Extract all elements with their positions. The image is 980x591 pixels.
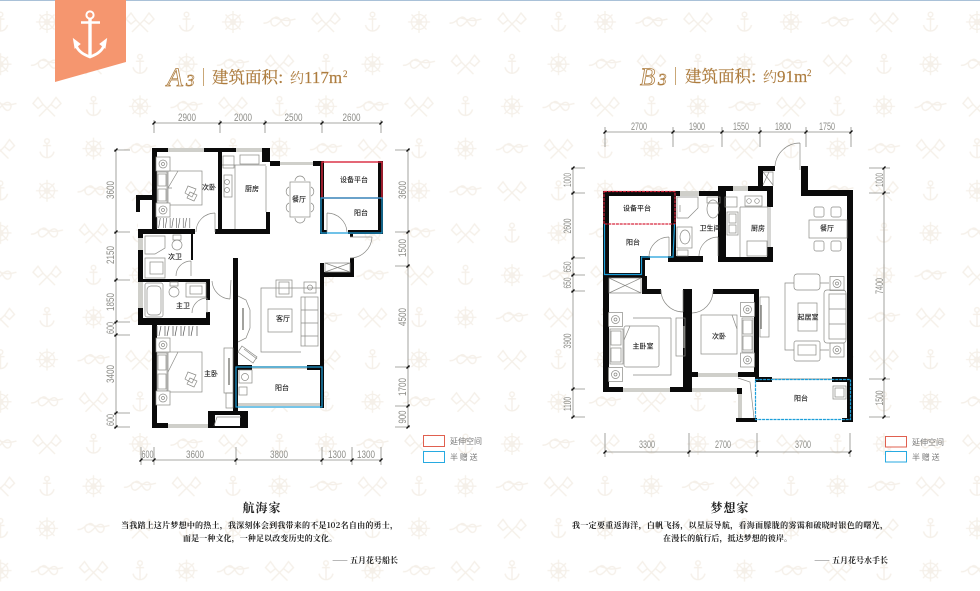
dimensions B3: top: 2700 (631, 121, 647, 133)
dimensions A3: right: 1700 (397, 378, 409, 396)
heading: A3 area (165, 63, 348, 92)
dimensions A3: left: 2150 (105, 246, 117, 264)
B3 room labels (623, 204, 834, 404)
dimensions A3: right: 1500 (397, 239, 409, 257)
dimensions A3: bottom: 3800 (270, 449, 288, 461)
A3 room labels: 阳台 (354, 208, 368, 218)
dimensions A3: bottom (140, 447, 382, 465)
dimensions B3: left: 1100 (562, 397, 574, 411)
A3 room labels: 客厅 (276, 314, 290, 324)
dimensions A3: left: 600 (105, 322, 117, 334)
dimensions B3: bottom: 2700 (715, 439, 731, 451)
dimensions B3: left: 650 (562, 262, 574, 272)
A3 furniture (145, 155, 372, 426)
A3 room labels: 厨房 (245, 184, 259, 194)
dimensions B3: left: 2600 (562, 218, 574, 234)
dimensions B3: left: 1000 (562, 173, 574, 187)
A3 room labels: 次卫 (168, 252, 182, 262)
B3 room labels: 设备平台 (623, 204, 651, 214)
dimensions B3: left: 650 (562, 278, 574, 288)
signature B3: —— 五月花号水手长 (814, 555, 888, 566)
heading: B3 area: 91m (777, 67, 807, 86)
caption A3 (121, 499, 398, 566)
heading: A3 area: 117m (304, 68, 342, 87)
caption body B3 (572, 520, 888, 544)
B3 room labels: 餐厅 (820, 224, 834, 234)
dimensions A3: bottom: 600 (142, 449, 154, 461)
B3 room labels: 主卧室 (632, 342, 654, 352)
A3 room labels: 次卧 (202, 182, 216, 192)
legend A3 (424, 436, 482, 463)
caption body A3: 当我踏上这片梦想中的热土，我深刻体会到我带来的不是102名自由的勇士， (121, 520, 398, 531)
B3 furniture (608, 143, 847, 418)
floor plan A3 (136, 148, 383, 428)
dimensions A3: right (395, 148, 410, 428)
A3 extension space outline (322, 162, 382, 198)
caption body A3: 而是一种文化，一种足以改变历史的文化。 (183, 533, 337, 544)
dimensions A3: right: 4500 (397, 308, 409, 326)
A3 windows (138, 148, 321, 428)
dimensions B3: top (604, 121, 852, 147)
B3 room labels: 厨房 (751, 224, 765, 234)
dimensions A3: left (105, 148, 130, 428)
B3 half-gift outlines (604, 224, 850, 420)
heading: B3 area: 2 (807, 68, 812, 78)
dimensions A3: left: 3400 (105, 365, 117, 383)
icon: anchor (74, 11, 106, 57)
signature A3: —— 五月花号船长 (332, 555, 398, 566)
caption body A3 (121, 520, 398, 544)
B3 room labels: 阳台 (626, 238, 640, 248)
A3 room labels: 设备平台 (340, 175, 368, 185)
legend A3: 半 赠 送 (450, 452, 478, 463)
dimensions A3: top: 2000 (234, 112, 252, 124)
dimensions B3: left (562, 166, 585, 418)
dimensions B3: right: 1000 (874, 173, 886, 187)
dimensions B3: top: 1550 (733, 121, 749, 133)
B3 windows (623, 186, 832, 418)
caption body B3: 在漫长的航行后，抵达梦想的彼岸。 (663, 533, 792, 544)
A3 room labels: 主卫 (176, 301, 190, 311)
top rule (0, 0, 980, 1)
dimensions B3: left: 3900 (562, 334, 574, 348)
heading: B3 area: 建筑面积: (685, 63, 756, 87)
floor plan B3 (603, 143, 853, 422)
B3 room labels: 起居室 (798, 312, 818, 322)
caption B3 (572, 499, 888, 566)
legend A3: 延伸空间 (450, 436, 482, 447)
heading: B3 area: 3 (657, 70, 666, 89)
dimensions A3: bottom: 1300 (328, 449, 346, 461)
heading: A3 area: 建筑面积: (212, 64, 283, 88)
B3 room labels: 卫生间 (700, 224, 720, 234)
dimensions A3: left: 3600 (105, 181, 117, 199)
dimensions A3: left: 600 (105, 414, 117, 426)
dimensions A3: bottom: 1300 (357, 449, 375, 461)
caption body B3: 我一定要重返海洋，白帆飞扬，以星辰导航，看海面朦胧的雾霭和破晓时银色的曙光， (572, 520, 888, 531)
dimensions A3: right: 900 (397, 410, 409, 424)
heading: A3 area: 2 (343, 69, 348, 79)
A3 half-gift outlines (236, 198, 382, 407)
legend B3 (886, 436, 944, 463)
B3 room labels: 次卧 (712, 332, 726, 342)
B3 room labels: 阳台 (794, 394, 808, 404)
caption title B3: 梦想家 (710, 499, 750, 516)
A3 walls (136, 148, 383, 428)
caption title A3: 航海家 (242, 499, 282, 516)
B3 extension space outline (604, 192, 675, 224)
dimensions B3: right: 1500 (874, 390, 886, 406)
dimensions B3: top: 1900 (689, 121, 705, 133)
B3 walls (603, 166, 853, 422)
legend B3: 半 赠 送 (912, 452, 940, 463)
dimensions B3: bottom: 3700 (795, 439, 811, 451)
ribbon with anchor icon (55, 0, 126, 82)
dimensions B3: right: 7400 (874, 278, 886, 294)
dimensions A3: right: 3600 (397, 181, 409, 199)
A3 room labels: 餐厅 (292, 194, 306, 204)
dimensions B3: top: 1750 (819, 121, 835, 133)
dimensions B3: right (869, 166, 890, 418)
legend B3: 延伸空间 (912, 437, 944, 448)
dimensions A3: left: 1850 (105, 293, 117, 311)
heading: B3 area: B (640, 64, 655, 91)
heading: B3 area: 约 (763, 67, 777, 87)
dimensions A3: bottom: 3600 (186, 449, 204, 461)
heading: B3 area (640, 63, 812, 91)
A3 room labels: 主卧 (204, 369, 218, 379)
dimensions B3: bottom (604, 433, 852, 457)
heading: A3 area: 约 (290, 68, 304, 88)
heading: A3 area: A (165, 63, 183, 92)
A3 room labels (168, 175, 368, 393)
dimensions A3: top: 2900 (178, 112, 196, 124)
dimensions B3: top: 1800 (775, 121, 791, 133)
dimensions A3: top: 2500 (284, 112, 302, 124)
dimensions B3: bottom: 3300 (639, 439, 655, 451)
heading: A3 area: 3 (185, 71, 194, 90)
dimensions A3: top: 2600 (342, 112, 360, 124)
dimensions A3: top (152, 112, 382, 133)
A3 room labels: 阳台 (275, 383, 289, 393)
